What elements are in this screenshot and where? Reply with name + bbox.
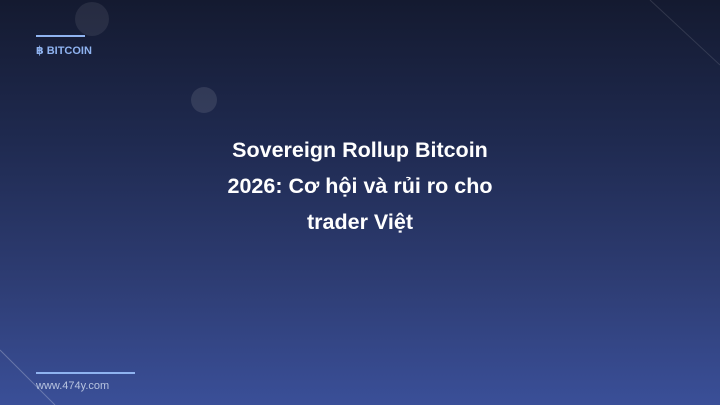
brand label: ฿ BITCOIN [36, 45, 92, 57]
title: 2026: Cơ hội và rủi ro cho [228, 174, 492, 198]
title: Sovereign Rollup Bitcoin [232, 138, 488, 162]
title [228, 138, 492, 234]
title: trader Việt [307, 210, 413, 234]
footer url: www.474y.com [36, 380, 109, 392]
